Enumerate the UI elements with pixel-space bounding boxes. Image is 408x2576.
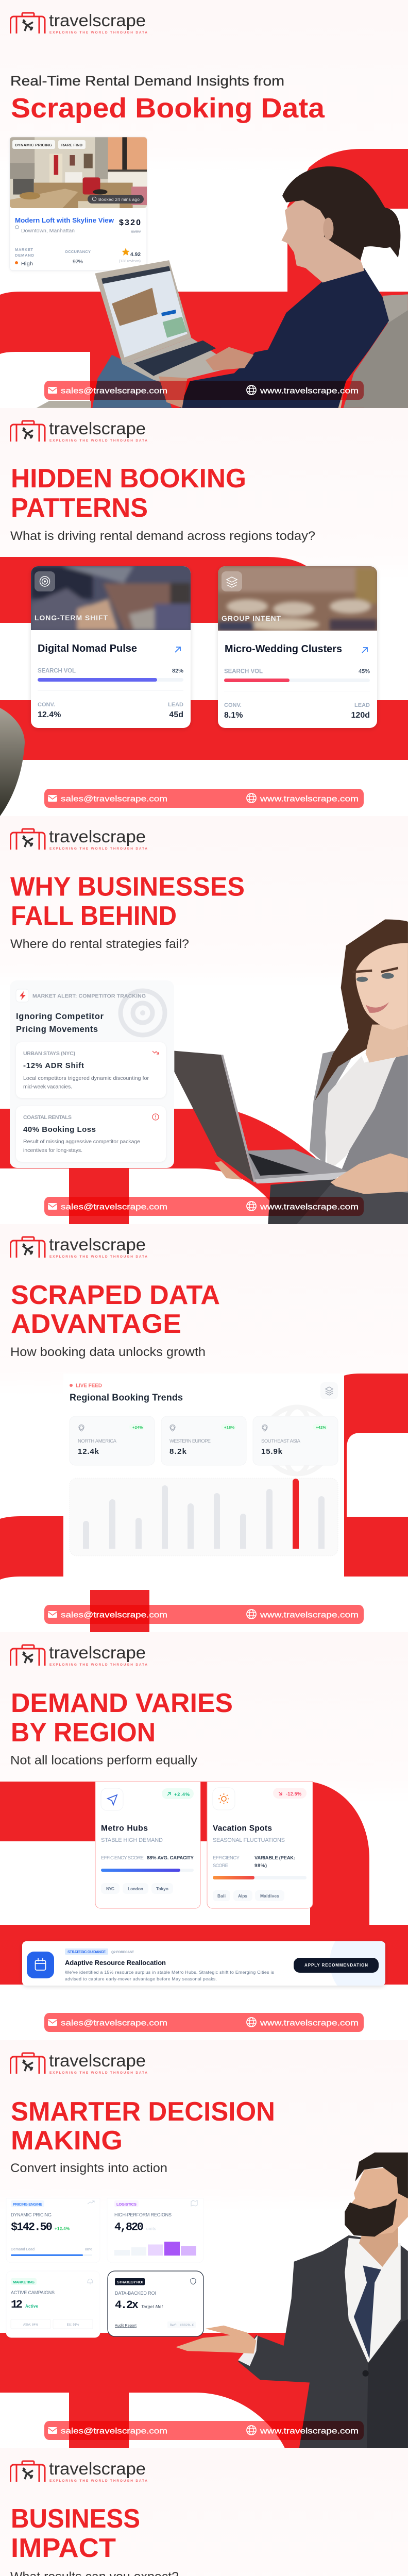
stat: north america: 12.4k <box>78 1447 99 1456</box>
card: pricing engine: $142.50 <box>11 2221 53 2234</box>
market demand <box>15 247 35 267</box>
card: strategy roi <box>108 2271 203 2336</box>
occupancy <box>65 249 91 265</box>
contact bar: sales@travelscrape.com <box>61 2019 167 2028</box>
contact bar <box>44 2421 364 2440</box>
section 3: why businesses fall behind <box>0 827 408 1224</box>
tags: Bali <box>217 1893 226 1899</box>
stats <box>38 690 183 719</box>
location: Downtown, Manhattan <box>21 228 75 234</box>
card: metro hubs <box>95 1782 200 1908</box>
contact bar: sales@travelscrape.com <box>61 794 167 804</box>
logo <box>10 2051 147 2075</box>
badge: dynamic pricing: DYNAMIC PRICING <box>15 143 52 147</box>
banner tags <box>65 1948 134 1955</box>
sofa fragment <box>0 708 25 816</box>
alert title: Pricing Movements <box>16 1025 98 1034</box>
badge: booked time: Booked 24 mins ago <box>98 197 140 202</box>
price: $320 <box>119 218 141 227</box>
section 1: hero <box>0 11 408 408</box>
card: marketing: 12 <box>11 2298 23 2311</box>
subtitle: Where do rental strategies fail? <box>10 937 189 951</box>
logo <box>10 2459 147 2483</box>
card: marketing: ASIA: 84% <box>23 2324 39 2327</box>
panel title: Regional Booking Trends <box>70 1392 183 1402</box>
heading: WHY BUSINESSES <box>10 872 245 902</box>
heading: SMARTER DECISION <box>11 2097 275 2127</box>
card title <box>213 1824 285 1843</box>
red background shapes <box>0 1374 408 1632</box>
listing title: Modern Loft with Skyline View <box>15 216 114 224</box>
label: LONG-TERM SHIFT <box>35 614 108 622</box>
subtitle: What is driving rental demand across regions today? <box>10 529 315 543</box>
banner title: Adaptive Resource Reallocation <box>65 1959 166 1967</box>
label: GROUP INTENT <box>222 614 281 622</box>
stat: north america: NORTH AMERICA <box>78 1438 117 1444</box>
card: marketing <box>6 2271 100 2337</box>
trend pill <box>273 1788 307 1799</box>
stats: 12.4% <box>38 710 61 719</box>
banner text: advised to capture early-mover advantage before May seasonal peaks. <box>65 1976 217 1981</box>
icon: sun <box>213 1788 235 1810</box>
search volume bar: 82% <box>172 668 183 674</box>
stat: western europe: +18% <box>224 1425 234 1430</box>
tags: Tokyo <box>156 1886 168 1891</box>
badge: rare find <box>58 140 86 149</box>
stat: southeast asia: SOUTHEAST ASIA <box>261 1438 301 1444</box>
efficiency bar <box>101 1855 194 1872</box>
card: coastal rentals <box>16 1106 166 1162</box>
contact bar <box>44 1605 364 1624</box>
alert label: MARKET ALERT: COMPETITOR TRACKING <box>32 993 146 999</box>
card: pricing engine: DYNAMIC PRICING <box>11 2212 52 2217</box>
section 4: scraped data advantage <box>0 1235 408 1632</box>
efficiency bar: VARIABLE (PEAK: <box>254 1855 295 1861</box>
panel: regional booking trends <box>63 1374 344 1577</box>
card title <box>101 1824 163 1843</box>
logo: travelscrape <box>49 1235 146 1254</box>
card: logistics <box>107 2198 203 2263</box>
card: pricing engine <box>6 2198 100 2263</box>
occupancy: OCCUPANCY <box>65 249 91 254</box>
contact bar <box>44 1197 364 1216</box>
tags: NYC <box>106 1886 114 1891</box>
search volume bar: SEARCH VOL <box>38 668 76 674</box>
stats <box>224 691 370 720</box>
card: strategy roi: Target Met <box>141 2304 163 2309</box>
rating <box>119 248 141 263</box>
logo: travelscrape <box>49 827 146 846</box>
price: $280 <box>131 229 141 234</box>
heading: ADVANTAGE <box>11 1309 181 1339</box>
card: strategy roi: STRATEGY ROI <box>117 2280 143 2284</box>
market demand: High <box>21 261 33 267</box>
card: marketing: ACTIVE CAMPAIGNS <box>11 2290 55 2295</box>
stat: north america: +24% <box>132 1425 143 1430</box>
logo: EXPLORING THE WORLD THROUGH DATA <box>49 1663 147 1667</box>
listing photo <box>10 137 147 209</box>
stat: southeast asia: +42% <box>316 1425 326 1430</box>
logo <box>10 11 147 35</box>
tags: London <box>128 1886 143 1891</box>
contact bar <box>44 789 364 808</box>
location <box>15 226 75 234</box>
card: coastal rentals: incentives for long-stays. <box>23 1147 82 1154</box>
logo <box>10 419 147 443</box>
listing card <box>10 137 147 270</box>
icon: navigation <box>101 1788 123 1810</box>
heading: SCRAPED DATA <box>11 1280 220 1310</box>
card: coastal rentals: Result of missing aggressive competitor package <box>23 1139 140 1145</box>
stats: CONV. <box>224 702 242 708</box>
card title: Vacation Spots <box>213 1824 272 1833</box>
card title: Digital Nomad Pulse <box>38 643 137 654</box>
price <box>119 218 141 234</box>
card: pricing engine: +12.4% <box>55 2227 70 2231</box>
logo: EXPLORING THE WORLD THROUGH DATA <box>49 31 147 35</box>
contact bar: sales@travelscrape.com <box>61 2427 167 2436</box>
card: logistics: units <box>146 2227 156 2231</box>
heading <box>11 2504 140 2563</box>
stats: 120d <box>351 711 370 720</box>
contact bar: www.travelscrape.com <box>260 2019 359 2028</box>
badge: rare find: RARE FIND <box>61 143 83 147</box>
red background shapes <box>0 1782 408 1985</box>
card: pricing engine: 88% <box>85 2248 92 2251</box>
stat: western europe: WESTERN EUROPE <box>169 1438 211 1444</box>
subtitle: Not all locations perform equally <box>10 1754 197 1767</box>
efficiency bar <box>213 1855 307 1879</box>
heading <box>10 872 245 931</box>
stat: southeast asia: 15.9k <box>261 1447 283 1456</box>
banner text: We've identified a 15% resource surplus in stable Metro Hubs. Strategic shift to Emerging Cities is <box>65 1970 275 1975</box>
card: logistics: HIGH-PERFORM REGIONS <box>114 2212 172 2217</box>
card title: SEASONAL FLUCTUATIONS <box>213 1837 285 1843</box>
button: APPLY RECOMMENDATION <box>304 1963 368 1968</box>
card: coastal rentals: COASTAL RENTALS <box>23 1114 72 1121</box>
button <box>294 1958 379 1973</box>
icon: layers <box>222 571 242 591</box>
title <box>10 73 325 124</box>
card title: Micro-Wedding Clusters <box>225 643 342 655</box>
logo: travelscrape <box>49 419 146 438</box>
contact bar <box>44 381 364 400</box>
heading: BY REGION <box>11 1718 156 1748</box>
card: coastal rentals: 40% Booking Loss <box>23 1125 96 1134</box>
card: digital nomad pulse <box>31 566 191 728</box>
card image <box>218 566 377 631</box>
badge: dynamic pricing <box>12 140 55 149</box>
layers button <box>320 1382 338 1399</box>
search volume bar <box>224 669 370 682</box>
card: logistics: LOGISTICS <box>116 2202 137 2207</box>
occupancy: 92% <box>73 259 83 265</box>
stat: western europe <box>161 1416 246 1465</box>
card: vacation spots <box>207 1782 313 1908</box>
market demand: DEMAND <box>15 253 35 258</box>
card image <box>31 566 191 630</box>
red background shape <box>0 557 408 760</box>
trend pill: +2.4% <box>174 1792 190 1797</box>
logo: travelscrape <box>49 11 146 30</box>
stats: 45d <box>169 710 183 719</box>
subtitle: How booking data unlocks growth <box>10 1345 206 1359</box>
card: micro-wedding clusters <box>218 566 377 728</box>
icon: calendar <box>27 1952 54 1978</box>
contact bar: sales@travelscrape.com <box>61 1611 167 1620</box>
section 7: business impact <box>10 2459 179 2576</box>
logo <box>10 1235 147 1259</box>
live feed label: LIVE FEED <box>76 1383 102 1389</box>
title: Scraped Booking Data <box>11 93 325 124</box>
card: urban stays <box>16 1042 166 1098</box>
contact bar: www.travelscrape.com <box>260 1611 359 1620</box>
stats: LEAD <box>168 702 183 708</box>
heading: HIDDEN BOOKING <box>11 464 246 494</box>
banner tags: Q2 FORECAST <box>111 1951 134 1954</box>
photo: woman on sofa with laptop <box>37 166 408 408</box>
badge: booked time <box>88 195 144 204</box>
contact bar: www.travelscrape.com <box>260 1202 359 1212</box>
watermark target <box>121 991 165 1035</box>
heading: BUSINESS <box>11 2504 140 2534</box>
tags <box>213 1890 284 1901</box>
section 5: demand varies by region <box>0 1643 408 2032</box>
search volume bar <box>38 668 183 682</box>
efficiency bar: SCORE <box>213 1863 228 1869</box>
icon: target <box>35 571 55 591</box>
arrow <box>362 648 367 653</box>
logo: EXPLORING THE WORLD THROUGH DATA <box>49 847 147 851</box>
market demand: MARKET <box>15 247 33 252</box>
logo <box>10 827 147 851</box>
logo: travelscrape <box>49 2051 146 2070</box>
card title: STABLE HIGH DEMAND <box>101 1837 163 1843</box>
search volume bar: 45% <box>359 669 370 675</box>
banner text <box>65 1970 275 1981</box>
card: pricing engine: Demand Load <box>11 2248 35 2251</box>
icon: lightning <box>16 989 29 1002</box>
arrow <box>175 647 180 652</box>
heading: DEMAND VARIES <box>11 1688 233 1718</box>
red background shape <box>0 149 408 408</box>
card: urban stays: mid-week vacancies. <box>23 1084 72 1090</box>
stat: southeast asia <box>253 1416 338 1465</box>
section 2: hidden booking patterns <box>0 419 408 816</box>
bar chart <box>70 1478 338 1556</box>
title: Real-Time Rental Demand Insights from <box>10 73 284 89</box>
logo: travelscrape <box>49 2459 146 2478</box>
stats: 8.1% <box>224 711 243 720</box>
banner tags: STRATEGIC GUIDANCE <box>67 1951 106 1954</box>
tags: Alps <box>238 1893 247 1899</box>
card: urban stays: -12% ADR Shift <box>23 1061 84 1070</box>
efficiency bar: 88% AVG. CAPACITY <box>147 1855 194 1861</box>
watermark globe <box>264 1407 331 1474</box>
efficiency bar: 98%) <box>254 1863 267 1869</box>
subtitle: Convert insights into action <box>10 2161 167 2175</box>
card: urban stays: Local competitors triggered dynamic discounting for <box>23 1075 149 1081</box>
card: pricing engine: PRICING ENGINE <box>13 2202 42 2207</box>
heading: IMPACT <box>11 2533 116 2563</box>
trend pill: -12.5% <box>286 1791 301 1797</box>
photo: man in suit <box>176 2153 408 2448</box>
contact bar: sales@travelscrape.com <box>61 386 167 396</box>
efficiency bar: EFFICIENCY <box>213 1855 240 1861</box>
rating: (128 reviews) <box>119 259 141 263</box>
section 6: smarter decision making <box>0 2051 408 2448</box>
heading: FALL BEHIND <box>11 901 177 931</box>
stat: western europe: 8.2k <box>169 1447 187 1456</box>
heading <box>11 2097 275 2156</box>
rating: 4.92 <box>130 252 141 258</box>
stat: north america <box>70 1416 155 1465</box>
photo: woman holding laptop <box>174 919 408 1224</box>
contact bar <box>44 2013 364 2032</box>
red background shape <box>0 1109 319 1224</box>
contact bar: www.travelscrape.com <box>260 2427 359 2436</box>
heading <box>11 1688 233 1748</box>
banner: strategic guidance <box>21 1941 386 1988</box>
stats: CONV. <box>38 702 55 708</box>
heading: PATTERNS <box>11 493 148 523</box>
tags <box>101 1883 173 1894</box>
trend pill <box>162 1788 194 1799</box>
card: logistics: 4,820 <box>114 2221 144 2234</box>
card: marketing: MARKETING <box>13 2280 35 2284</box>
panel: market alert <box>10 980 174 1168</box>
contact bar: sales@travelscrape.com <box>61 1202 167 1212</box>
card: strategy roi: Audit Report <box>115 2324 137 2328</box>
card: strategy roi: DATA-BACKED ROI <box>115 2291 156 2296</box>
logo: travelscrape <box>49 1643 146 1662</box>
logo: EXPLORING THE WORLD THROUGH DATA <box>49 2479 147 2483</box>
card: marketing: EU: 91% <box>67 2324 79 2327</box>
heading: MAKING <box>11 2126 123 2156</box>
red background shape <box>0 2333 319 2448</box>
card: strategy roi: Ref: #8829-X <box>170 2324 194 2327</box>
card title: Metro Hubs <box>101 1824 148 1833</box>
card: marketing: Active <box>25 2304 39 2309</box>
contact bar: www.travelscrape.com <box>260 794 359 804</box>
stats: LEAD <box>354 702 370 708</box>
alert title <box>16 1012 104 1034</box>
logo: EXPLORING THE WORLD THROUGH DATA <box>49 439 147 443</box>
heading <box>11 464 246 523</box>
heading <box>11 1280 220 1339</box>
logo: EXPLORING THE WORLD THROUGH DATA <box>49 2071 147 2075</box>
search volume bar: SEARCH VOL <box>224 669 263 675</box>
efficiency bar: EFFICIENCY SCORE <box>101 1855 144 1861</box>
contact bar: www.travelscrape.com <box>260 386 359 396</box>
tags: Maldives <box>260 1893 279 1899</box>
card: urban stays: URBAN STAYS (NYC) <box>23 1050 75 1057</box>
alert title: Ignoring Competitor <box>16 1012 104 1021</box>
logo <box>10 1643 147 1667</box>
logo: EXPLORING THE WORLD THROUGH DATA <box>49 1255 147 1259</box>
card: strategy roi: 4.2x <box>115 2299 139 2312</box>
